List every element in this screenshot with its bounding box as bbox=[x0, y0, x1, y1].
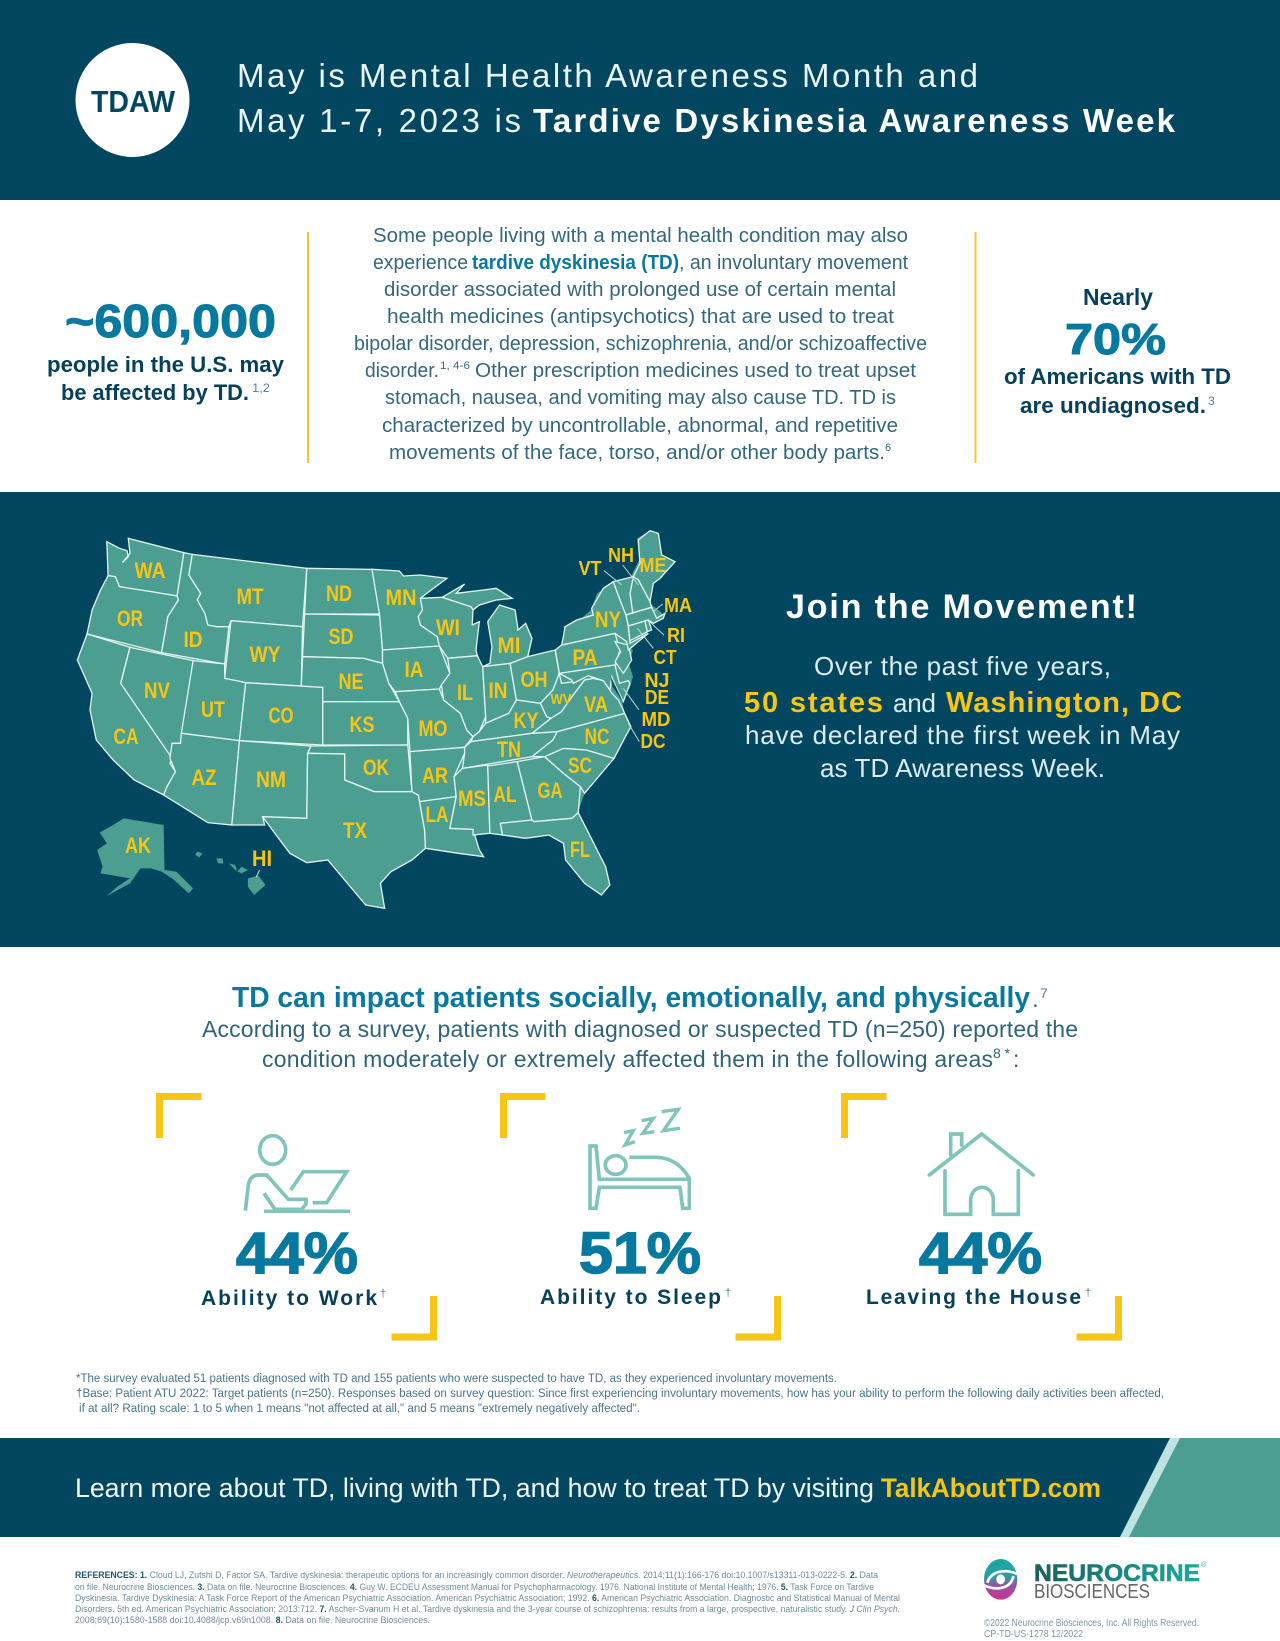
state abbreviations: NY bbox=[595, 607, 621, 632]
stat card: ability to sleep: † bbox=[725, 1287, 731, 1299]
state abbreviations: VA bbox=[584, 692, 608, 717]
state abbreviations: NE bbox=[338, 669, 364, 694]
state abbreviations: MT bbox=[236, 584, 264, 609]
icon: house bbox=[929, 1134, 1033, 1214]
call to action text: TalkAboutTD.com bbox=[881, 1473, 1101, 1503]
text block: tardive dyskinesia description: Some people living with a mental health condition may also bbox=[373, 225, 908, 247]
northeast state abbreviations bbox=[578, 545, 692, 753]
title: May is Mental Health Awareness Month and bbox=[237, 57, 978, 94]
stat card: ability to work: 44% bbox=[236, 1221, 358, 1286]
state abbreviations: WI bbox=[436, 615, 460, 640]
text block: tardive dyskinesia description: characterized by uncontrollable, abnormal, and repetitive bbox=[382, 415, 898, 437]
text block: awareness week declaration: as TD Awareness Week. bbox=[820, 753, 1105, 783]
heading: social, emotional and physical impact: TD can impact patients socially, emotionally, and physically bbox=[232, 982, 1030, 1014]
text block: tardive dyskinesia description: Other prescription medicines used to treat upset bbox=[475, 360, 916, 382]
panel: call to action band bbox=[0, 1438, 1280, 1537]
heading: social, emotional and physical impact: . bbox=[1032, 986, 1039, 1013]
logo: Neurocrine Biosciences: NEUROCRINE bbox=[1034, 1560, 1200, 1587]
text block: survey footnotes bbox=[76, 1373, 1164, 1415]
northeast state abbreviations: NJ bbox=[644, 670, 670, 692]
icon: person sleeping in bed bbox=[590, 1109, 689, 1208]
northeast state abbreviations: VT bbox=[578, 558, 602, 580]
text block: tardive dyskinesia description: experience bbox=[373, 252, 468, 274]
northeast state abbreviations: MD bbox=[642, 709, 670, 731]
stat card: ability to sleep bbox=[504, 1096, 778, 1337]
stat card: leaving the house bbox=[844, 1096, 1118, 1337]
text block: references: Disorders. 5th ed. American Psychiatric Association; 2013:712. 7. Ascher-Svanum H et al. Tardive dyskinesia and the 3-year course of schizophrenia: results from a large, prospective, naturalistic study. J Clin Psych. bbox=[75, 1604, 900, 1615]
callout: 600,000 people affected: ~600,000 bbox=[65, 295, 276, 347]
state abbreviations: HI bbox=[252, 846, 272, 871]
state abbreviations: ID bbox=[184, 627, 202, 652]
text block: tardive dyskinesia description: tardive dyskinesia (TD) bbox=[472, 252, 679, 274]
text block: survey introduction bbox=[202, 1016, 1078, 1072]
state abbreviations: SD bbox=[328, 624, 354, 649]
text block: references: Dyskinesia. Tardive Dyskinesia: A Task Force Report of the American Psychiatric Association. American Psychiatric Association; 1992. 6. American Psychiatric Association. Diagnostic and Statistical Manual of Mental bbox=[75, 1593, 900, 1604]
state abbreviations: NM bbox=[256, 767, 286, 792]
text block: awareness week declaration: 50 states bbox=[744, 687, 883, 719]
panel: impact of TD bbox=[0, 947, 1280, 1437]
state abbreviations: OK bbox=[363, 755, 389, 780]
callout: 600,000 people affected: 1,2 bbox=[252, 381, 270, 395]
text block: references bbox=[75, 1570, 900, 1626]
state abbreviations: CO bbox=[268, 703, 294, 728]
state abbreviations: WA bbox=[134, 558, 166, 583]
callout: 70% undiagnosed bbox=[1004, 284, 1231, 418]
text block: survey introduction: According to a survey, patients with diagnosed or suspected TD (n=250) reported the bbox=[202, 1016, 1078, 1042]
callout: 600,000 people affected: people in the U.S. may bbox=[47, 352, 285, 377]
title: Tardive Dyskinesia Awareness Week bbox=[533, 102, 1176, 139]
heading: social, emotional and physical impact: 7 bbox=[1040, 985, 1048, 1001]
state abbreviations: FL bbox=[570, 837, 590, 862]
text block: tardive dyskinesia description: disorder associated with prolonged use of certain mental bbox=[384, 279, 896, 301]
text block: tardive dyskinesia description: disorder. bbox=[365, 360, 439, 382]
callout: 70% undiagnosed: 3 bbox=[1208, 394, 1215, 408]
text block: tardive dyskinesia description bbox=[354, 225, 927, 464]
text block: awareness week declaration: Washington, DC bbox=[946, 687, 1182, 719]
text block: references: on file. Neurocrine Biosciences. 3. Data on file. Neurocrine Biosciences. 4. Guy W. ECDEU Assessment Manual for Psychopharmacology. 1976. National Institute of Mental Health; 1976. 5. Task Force on Tardive bbox=[75, 1582, 874, 1593]
state abbreviations: IL bbox=[457, 680, 473, 705]
state abbreviations: OR bbox=[117, 606, 143, 631]
state abbreviations: AZ bbox=[192, 765, 216, 790]
state abbreviations: ND bbox=[326, 581, 352, 606]
panel: join the movement bbox=[0, 492, 1280, 947]
text block: copyright bbox=[984, 1617, 1199, 1640]
text block: awareness week declaration bbox=[744, 651, 1182, 783]
text block: tardive dyskinesia description: stomach, nausea, and vomiting may also cause TD. TD is bbox=[385, 387, 896, 409]
state abbreviations bbox=[114, 558, 621, 871]
callout: 600,000 people affected: be affected by TD. bbox=[61, 380, 249, 405]
text block: survey introduction: : bbox=[1013, 1046, 1019, 1072]
stat card: leaving the house: † bbox=[1085, 1287, 1091, 1299]
text block: copyright: ©2022 Neurocrine Biosciences, Inc. All Rights Reserved. bbox=[984, 1617, 1199, 1629]
text block: tardive dyskinesia description: movements of the face, torso, and/or other body parts. bbox=[389, 442, 885, 464]
callout: 600,000 people affected bbox=[47, 295, 285, 405]
state abbreviations: SC bbox=[568, 753, 592, 778]
state abbreviations: UT bbox=[201, 697, 225, 722]
state abbreviations: AR bbox=[422, 763, 448, 788]
state abbreviations: WY bbox=[250, 642, 281, 667]
state abbreviations: KS bbox=[350, 712, 374, 737]
text block: survey introduction: 8* bbox=[993, 1045, 1011, 1061]
northeast state abbreviations: NH bbox=[608, 545, 634, 567]
state abbreviations: IN bbox=[488, 678, 508, 703]
stat card: ability to work: Ability to Work bbox=[201, 1287, 377, 1310]
text block: survey footnotes: if at all? Rating scale: 1 to 5 when 1 means "not affected at all," and 5 means "extremely negatively affected". bbox=[79, 1403, 640, 1415]
stat card: ability to work bbox=[160, 1096, 434, 1337]
text block: tardive dyskinesia description: health medicines (antipsychotics) that are used to treat bbox=[387, 306, 894, 328]
panel: header banner bbox=[0, 0, 1280, 200]
stat card: leaving the house: Leaving the House bbox=[866, 1286, 1081, 1309]
icon: swirl mark bbox=[984, 1559, 1017, 1600]
northeast state abbreviations: RI bbox=[667, 625, 685, 647]
callout: 70% undiagnosed: Nearly bbox=[1083, 284, 1153, 310]
state abbreviations: AK bbox=[125, 833, 151, 858]
state abbreviations: KY bbox=[514, 708, 539, 733]
logo: Neurocrine Biosciences bbox=[984, 1559, 1207, 1603]
state abbreviations: MO bbox=[418, 716, 448, 741]
text block: survey introduction: condition moderately or extremely affected them in the following areas bbox=[262, 1046, 993, 1072]
northeast state abbreviations: CT bbox=[654, 647, 676, 669]
text block: references: REFERENCES: 1. Cloud LJ, Zutshi D, Factor SA. Tardive dyskinesia: therapeutic options for an increasingly common disorder. Neurotherapeutics. 2014;11(1):166-176 doi:10.1007/s13311-013-0222-5. 2. Data bbox=[75, 1570, 879, 1581]
text block: tardive dyskinesia description: bipolar disorder, depression, schizophrenia, and/or schizoaffective bbox=[354, 333, 927, 355]
callout: 70% undiagnosed: of Americans with TD bbox=[1004, 364, 1231, 389]
text block: awareness week declaration: Over the past five years, bbox=[814, 651, 1111, 681]
text block: survey footnotes: *The survey evaluated 51 patients diagnosed with TD and 155 patients who were suspected to have TD, as they experienced involuntary movements. bbox=[76, 1373, 837, 1385]
text block: awareness week declaration: have declared the first week in May bbox=[745, 720, 1180, 750]
text block: survey footnotes: †Base: Patient ATU 2022: Target patients (n=250). Responses based on survey question: Since first experiencing involuntary movements, how has your ability to perform the following daily activities been affected, bbox=[76, 1388, 1164, 1400]
northeast state abbreviations: DC bbox=[640, 731, 666, 753]
stat card: ability to sleep: 51% bbox=[579, 1221, 701, 1286]
text block: tardive dyskinesia description: 6 bbox=[885, 442, 891, 454]
northeast state abbreviations: DE bbox=[645, 687, 669, 709]
northeast state abbreviations: ME bbox=[640, 555, 666, 577]
state abbreviations: TX bbox=[343, 818, 367, 843]
northeast state abbreviations: MA bbox=[664, 595, 692, 617]
icon: person at laptop bbox=[245, 1136, 350, 1211]
state abbreviations: NC bbox=[584, 724, 610, 749]
state abbreviations: CA bbox=[114, 724, 139, 749]
callout: 70% undiagnosed: are undiagnosed. bbox=[1020, 393, 1206, 418]
logo: Neurocrine Biosciences: BIOSCIENCES bbox=[1034, 1581, 1150, 1603]
logo: Neurocrine Biosciences: ® bbox=[1201, 1561, 1207, 1569]
text block: references: 2008;69(10):1580-1588 doi:10.4088/jcp.v69n1008. 8. Data on file. Neurocrine Biosciences. bbox=[75, 1615, 430, 1626]
text block: tardive dyskinesia description: 1, 4-6 bbox=[440, 360, 470, 372]
icon: TDAW circle badge: TDAW bbox=[91, 84, 176, 119]
state abbreviations: MI bbox=[498, 633, 520, 658]
state abbreviations: MN bbox=[386, 585, 416, 610]
state abbreviations: AL bbox=[494, 782, 516, 807]
state abbreviations: NV bbox=[144, 678, 170, 703]
icon: TDAW circle badge bbox=[76, 43, 190, 157]
text block: copyright: CP-TD-US-1278 12/2022 bbox=[984, 1628, 1083, 1640]
state abbreviations: MS bbox=[458, 786, 486, 811]
state abbreviations: PA bbox=[572, 645, 598, 670]
panel: intro statistics bbox=[0, 200, 1280, 492]
state abbreviations: OH bbox=[520, 667, 548, 692]
title: May 1-7, 2023 is bbox=[237, 102, 521, 139]
state abbreviations: LA bbox=[426, 802, 449, 827]
heading: join the movement: Join the Movement! bbox=[786, 588, 1137, 626]
state abbreviations: IA bbox=[404, 657, 424, 682]
title bbox=[237, 57, 1176, 139]
call to action text: Learn more about TD, living with TD, and how to treat TD by visiting bbox=[75, 1473, 874, 1503]
state abbreviations: TN bbox=[497, 737, 521, 762]
callout: 70% undiagnosed: 70% bbox=[1065, 315, 1166, 364]
stat card: ability to work: † bbox=[380, 1288, 386, 1300]
stat card: ability to sleep: Ability to Sleep bbox=[540, 1286, 721, 1309]
chart: US state map shapes bbox=[77, 531, 675, 908]
stat card: leaving the house: 44% bbox=[919, 1221, 1042, 1286]
leader lines for northeast states bbox=[256, 565, 664, 877]
text block: tardive dyskinesia description: , an involuntary movement bbox=[679, 252, 908, 274]
state abbreviations: GA bbox=[538, 778, 563, 803]
state abbreviations: WV bbox=[550, 691, 572, 708]
text block: awareness week declaration: and bbox=[893, 688, 936, 718]
